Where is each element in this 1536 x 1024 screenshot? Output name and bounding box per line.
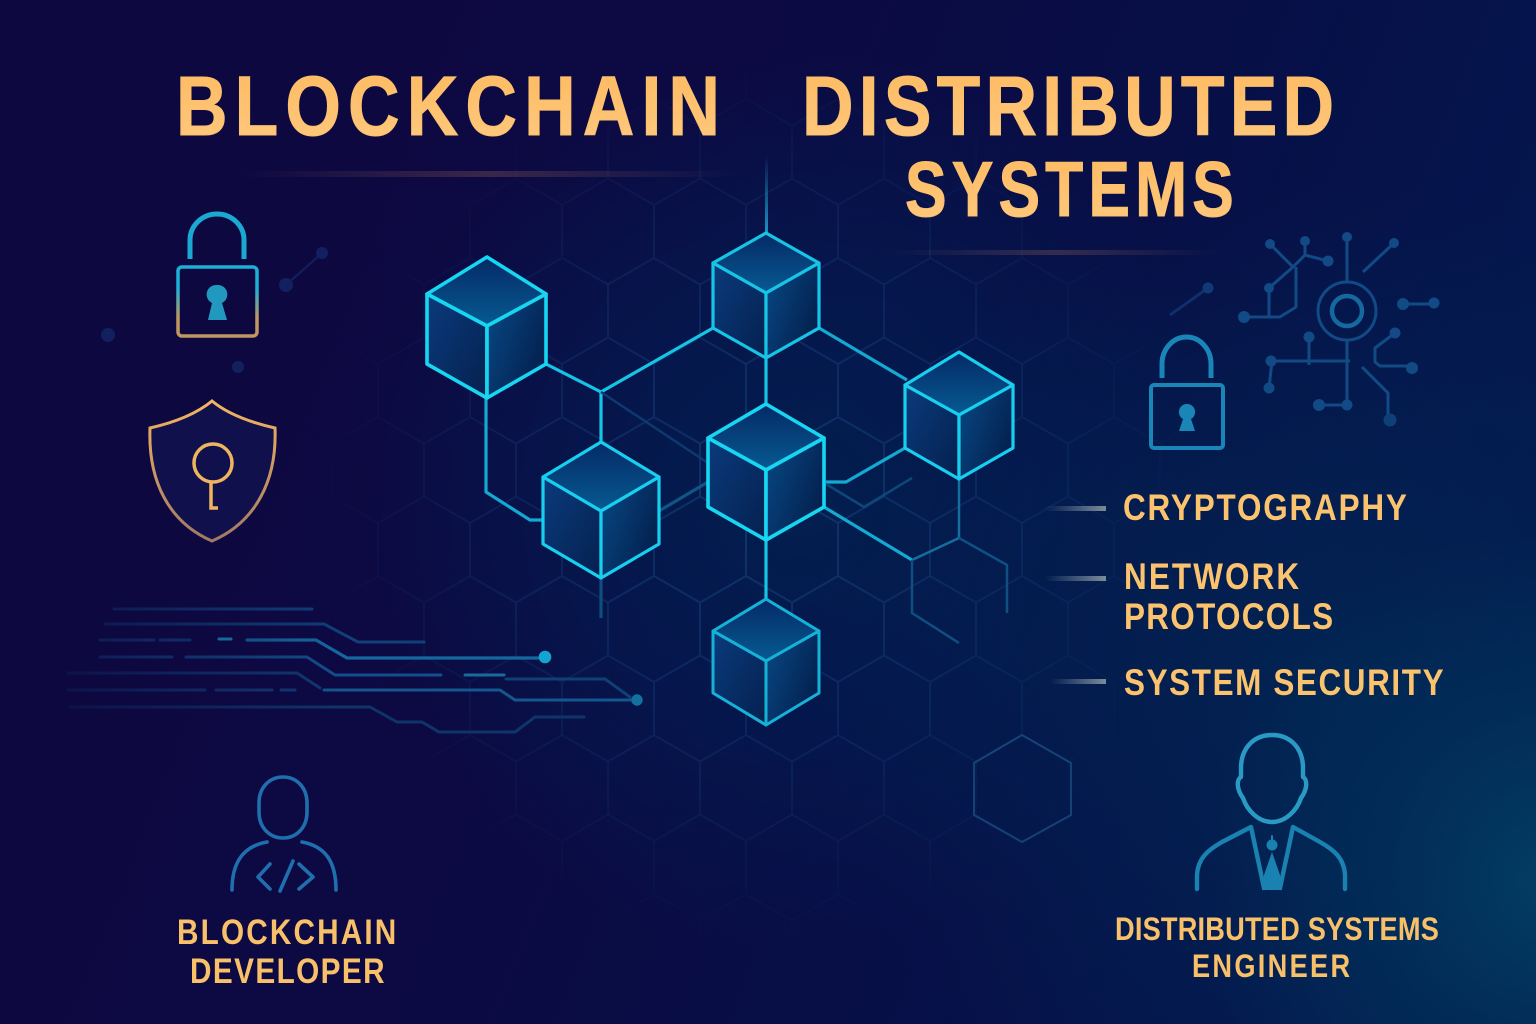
cube 4 <box>708 404 824 540</box>
icon: blockchain developer <box>232 777 336 891</box>
network connectors <box>486 328 1007 643</box>
icon: padlock right <box>1151 337 1223 448</box>
label: blockchain developer: DEVELOPER <box>190 952 385 991</box>
title: BLOCKCHAIN <box>176 58 720 153</box>
cube 3 <box>905 352 1013 479</box>
cube 5 <box>543 442 659 578</box>
label: distributed systems engineer: ENGINEER <box>1192 949 1350 985</box>
icon: distributed systems engineer <box>1197 735 1345 890</box>
label: distributed systems engineer <box>1115 912 1439 985</box>
cube 1 <box>427 257 546 398</box>
top connector line <box>765 155 768 233</box>
title: DISTRIBUTED <box>802 58 1334 153</box>
circuit traces <box>68 609 632 732</box>
icon: shield with key <box>150 401 275 541</box>
title <box>176 58 1334 233</box>
list: topics: SYSTEM SECURITY <box>1124 663 1444 704</box>
background <box>370 0 1536 1024</box>
list: topics: CRYPTOGRAPHY <box>1123 488 1407 529</box>
list: topics: PROTOCOLS <box>1124 597 1333 638</box>
label: blockchain developer <box>177 913 396 991</box>
title: SYSTEMS <box>905 145 1234 233</box>
faint hexagon lower right <box>974 735 1071 842</box>
label: distributed systems engineer: DISTRIBUTED SYSTEMS <box>1115 912 1439 948</box>
icon: circuit network right <box>1170 232 1440 426</box>
cube 2 <box>713 233 819 358</box>
list: topics: NETWORK <box>1124 557 1299 598</box>
faint network nodes left <box>102 248 327 372</box>
cube 6 <box>713 599 819 725</box>
list dashes <box>1045 506 1106 684</box>
label: blockchain developer: BLOCKCHAIN <box>177 913 396 952</box>
icon: padlock left <box>178 214 257 336</box>
list: topics <box>1123 488 1444 704</box>
title underlines <box>240 171 1220 255</box>
circuit trace end nodes <box>539 651 643 706</box>
